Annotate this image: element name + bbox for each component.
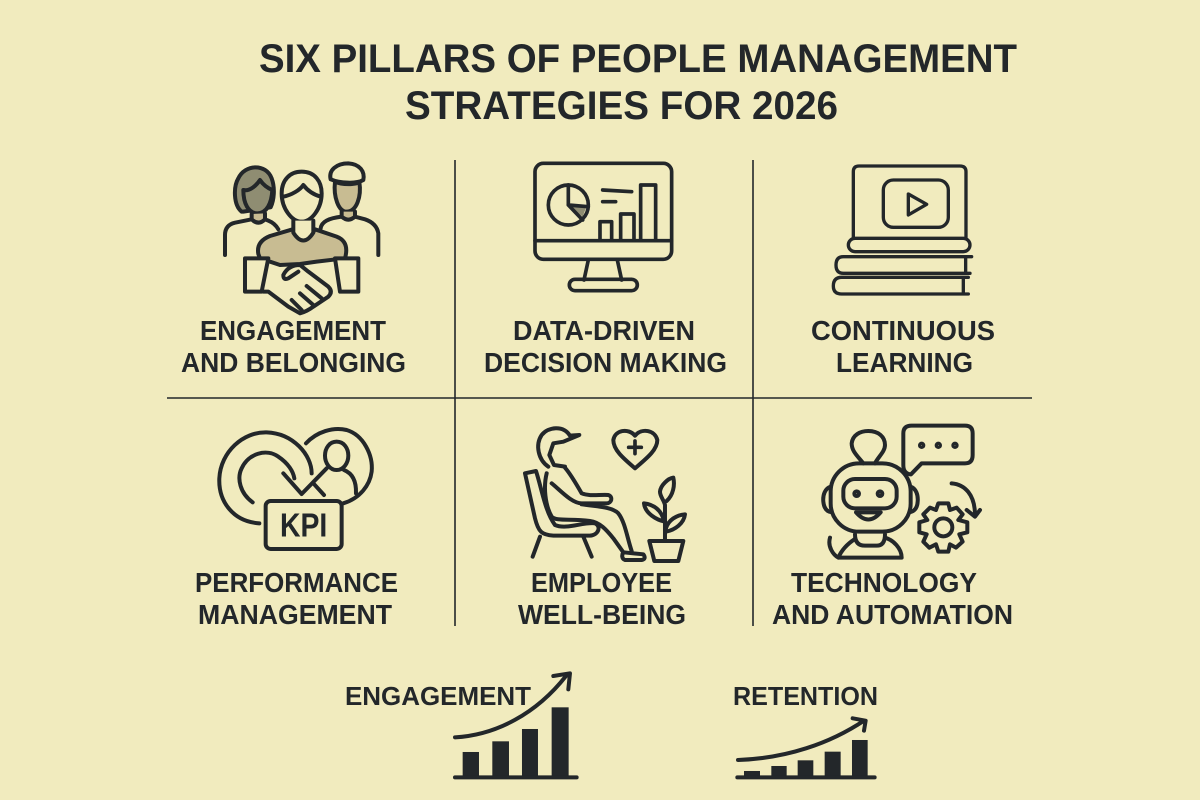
chart: retention growth <box>733 681 878 777</box>
icon: team and handshake <box>225 163 378 313</box>
panel: engagement and belonging <box>181 163 406 378</box>
icon: KPI cycle: KPI <box>280 508 327 545</box>
label: data-driven decision making: DECISION MAKING <box>484 347 727 378</box>
label: performance management <box>195 567 398 630</box>
label: continuous learning <box>811 315 995 378</box>
panel: employee well-being <box>518 428 686 630</box>
icon: video screen on books <box>833 166 972 294</box>
label: employee well-being: WELL-BEING <box>518 599 686 630</box>
label: technology and automation <box>772 567 1013 630</box>
label: engagement and belonging <box>181 315 406 378</box>
bars and rising arrow <box>455 673 577 777</box>
panel: technology and automation <box>772 426 1013 630</box>
icon: monitor with charts <box>535 163 672 291</box>
label: data-driven decision making: DATA-DRIVEN <box>513 315 695 346</box>
label: employee well-being <box>518 567 686 630</box>
label: performance management: MANAGEMENT <box>198 599 392 630</box>
label: continuous learning: LEARNING <box>836 347 973 378</box>
label: technology and automation: AND AUTOMATION <box>772 599 1013 630</box>
label: technology and automation: TECHNOLOGY <box>791 567 977 598</box>
label: employee well-being: EMPLOYEE <box>531 567 672 598</box>
label: performance management: PERFORMANCE <box>195 567 398 598</box>
title <box>259 37 1017 128</box>
chart: engagement growth <box>345 673 577 777</box>
icon: KPI cycle <box>219 429 372 549</box>
bars and rising arrow <box>737 718 875 777</box>
panel: continuous learning <box>811 166 995 378</box>
label: data-driven decision making <box>484 315 727 378</box>
title: SIX PILLARS OF PEOPLE MANAGEMENT <box>259 37 1017 81</box>
panel: data-driven decision making <box>484 163 727 378</box>
label: retention: RETENTION <box>733 681 878 711</box>
title: STRATEGIES FOR 2026 <box>405 84 838 128</box>
panel: performance management <box>195 429 398 630</box>
icon: robot, speech bubble and gear <box>823 426 980 558</box>
label: engagement and belonging: AND BELONGING <box>181 347 406 378</box>
icon: seated person, heart and plant <box>525 428 685 561</box>
label: engagement: ENGAGEMENT <box>345 681 531 711</box>
label: engagement and belonging: ENGAGEMENT <box>200 315 386 346</box>
label: continuous learning: CONTINUOUS <box>811 315 995 346</box>
